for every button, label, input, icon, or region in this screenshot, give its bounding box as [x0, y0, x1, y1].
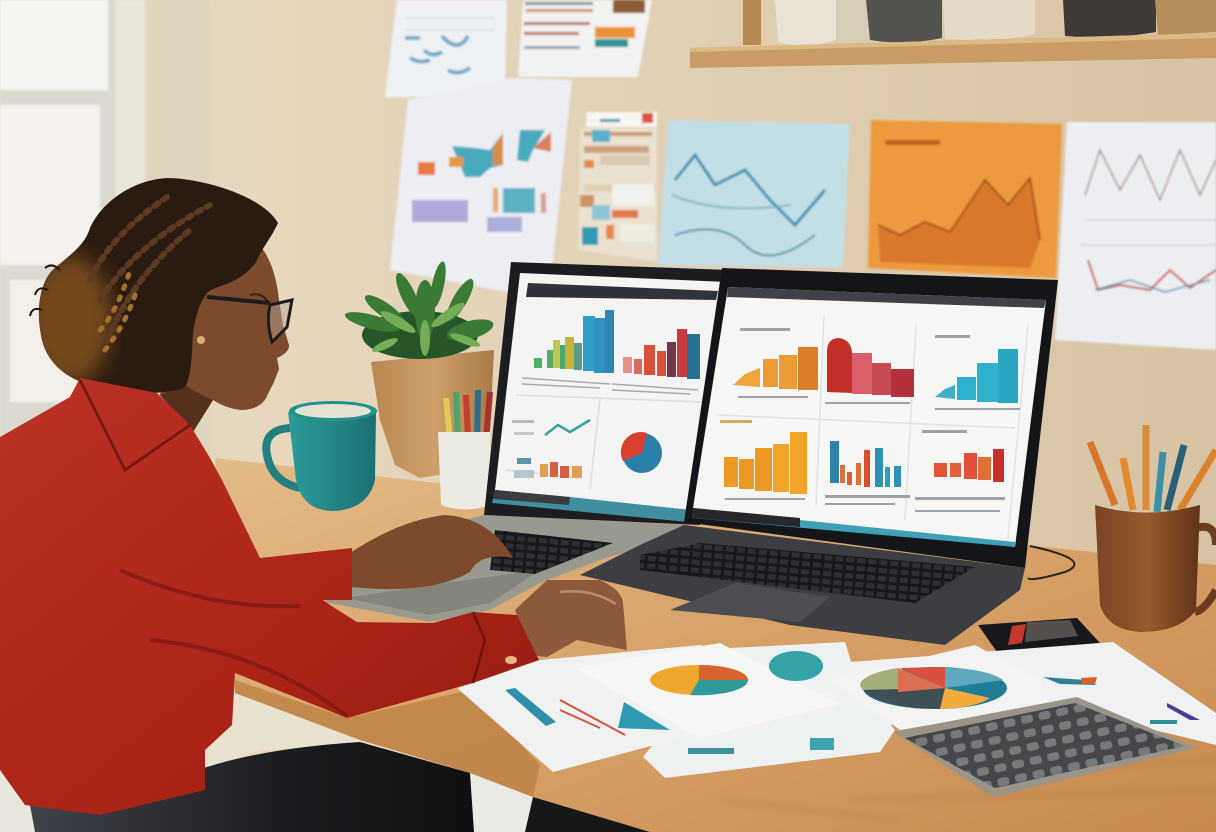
- wall paper: top sketch: [385, 0, 507, 97]
- left laptop: red bar chart: [623, 329, 700, 379]
- teal mug: [266, 401, 377, 511]
- right laptop: [580, 268, 1058, 645]
- left laptop: teal bar chart: [534, 310, 614, 373]
- window: [0, 0, 210, 470]
- neck and face: [160, 243, 289, 432]
- trousers: [30, 742, 474, 832]
- pencil holder: [438, 390, 490, 510]
- glasses: [207, 297, 292, 342]
- power cable: [1028, 546, 1074, 579]
- wall paper: collage note: [578, 112, 657, 262]
- right laptop: orange bar chart: [733, 347, 818, 390]
- left laptop: [325, 262, 730, 622]
- small keyboard: [893, 697, 1197, 797]
- brown pencil cup: [1090, 425, 1216, 632]
- left laptop: panel divider lines: [506, 378, 702, 490]
- paper: large pie: [860, 667, 1007, 709]
- red shirt: [0, 378, 539, 815]
- chair back: [0, 768, 48, 832]
- far hand on trackpad: [350, 515, 513, 589]
- paper: small charts: [505, 677, 1200, 754]
- right laptop: mixed bar chart: [830, 441, 901, 487]
- right laptop: teal bar chart: [935, 349, 1018, 403]
- wall paper: light blue line chart: [658, 120, 850, 268]
- papers on desk: [457, 642, 1216, 778]
- right laptop: label lines: [720, 328, 1020, 512]
- wall paper: white line chart: [1055, 122, 1216, 350]
- wall paper: orange area chart: [868, 120, 1062, 278]
- right laptop: orange bar chart lower: [724, 432, 807, 494]
- shelf with objects: [690, 0, 1216, 68]
- right laptop: red orange bar chart: [934, 449, 1004, 482]
- right laptop: red bar chart: [827, 338, 914, 397]
- dark leg under desk: [525, 797, 650, 832]
- wall paper: colour chart sheet: [390, 78, 572, 293]
- paper: colourful pie: [650, 665, 748, 695]
- near hand: [515, 580, 627, 657]
- left laptop: small infographic panel: [512, 420, 590, 478]
- person: [0, 178, 627, 832]
- paper: teal globe: [769, 651, 823, 681]
- hair: [28, 178, 278, 393]
- desk: [215, 458, 1216, 832]
- left laptop: pie chart: [621, 432, 662, 473]
- right laptop: panel divider lines: [718, 316, 1028, 538]
- under desk wall: [200, 690, 535, 832]
- potted plant: [343, 260, 496, 478]
- phone: [978, 618, 1100, 652]
- wall paper: top bar list: [518, 0, 652, 77]
